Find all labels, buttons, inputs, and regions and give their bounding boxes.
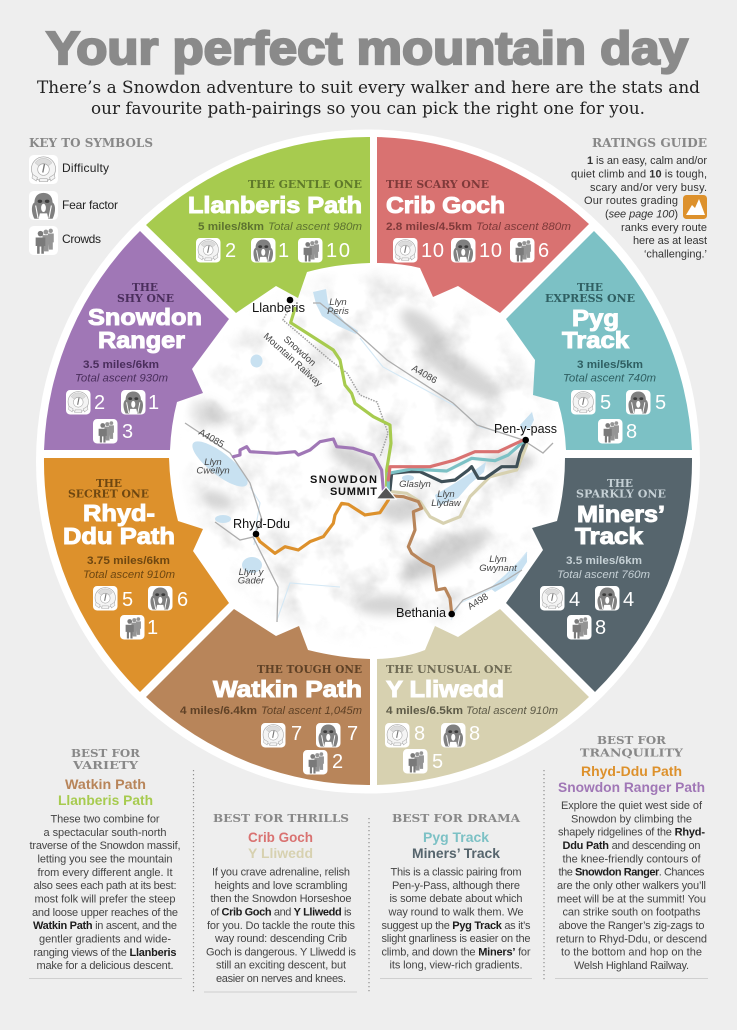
wedge <box>146 137 370 313</box>
rating: difficulty 4 <box>540 586 580 611</box>
strapline: SPARKLY ONE <box>576 488 666 500</box>
lake and road labels: Llydaw <box>431 498 462 509</box>
ratings text: ‘challenging.’ <box>644 248 707 260</box>
icon: grading mountain <box>683 195 707 219</box>
column: best for drama <box>382 812 531 972</box>
rating: fear 6: 6 <box>177 589 188 611</box>
body text: the Snowdon Ranger. Chances <box>558 867 705 879</box>
rating: difficulty 7 <box>261 723 302 748</box>
strapline <box>68 477 149 500</box>
place names: Llanberis <box>252 301 305 315</box>
stats: 5 miles/8km <box>198 221 264 233</box>
wedge <box>377 609 589 785</box>
rating: fear 10 <box>451 238 502 262</box>
panel: Pyg Track <box>506 231 692 450</box>
stats: Total ascent 880m <box>476 221 571 233</box>
route names: Pyg Track <box>423 829 489 845</box>
route: Rhyd-Ddu <box>256 500 388 553</box>
route name <box>63 500 175 549</box>
lake and road labels: Llyn <box>437 489 455 500</box>
stats <box>563 359 656 384</box>
white circle backing <box>36 130 700 794</box>
rating: fear 8: 8 <box>469 723 480 745</box>
route name: Ranger <box>98 327 185 353</box>
route: Miners' Track <box>390 442 525 490</box>
route names: Snowdon Ranger Path <box>558 779 705 795</box>
place names <box>233 301 557 620</box>
body text <box>382 867 531 972</box>
strapline: THE <box>96 477 122 490</box>
key: difficulty: Difficulty <box>62 161 109 175</box>
key heading: KEY TO SYMBOLS <box>29 136 153 150</box>
stats: 4 miles/6.4km <box>180 705 257 717</box>
ratings text: ranks every route <box>621 222 707 234</box>
stats: Total ascent 1,045m <box>261 705 362 717</box>
body text: to the bottom and hop on the <box>561 947 702 959</box>
rating: crowds 5: 5 <box>432 751 443 773</box>
intro text <box>37 78 700 118</box>
lake and road labels: A4085 <box>196 427 226 450</box>
map: Snowdon massif <box>184 274 554 624</box>
body text: shapely ridgelines of the Rhyd- <box>558 827 705 839</box>
body text <box>30 814 180 972</box>
body text: the knee-friendly contours of <box>562 853 701 865</box>
rating: fear 5: 5 <box>655 392 666 414</box>
panel: Snowdon Ranger <box>44 231 229 450</box>
rating: difficulty 10: 10 <box>421 240 444 262</box>
rating: difficulty 4: 4 <box>569 589 580 611</box>
strapline: THE TOUGH ONE <box>257 663 362 676</box>
ratings guide <box>571 136 707 260</box>
stats: 2.8 miles/4.5km <box>386 221 472 233</box>
route names <box>412 829 500 861</box>
body text: traverse of the Snowdon massif, <box>30 840 180 852</box>
rating: crowds 1: 1 <box>147 617 158 639</box>
body text: and loose upper reaches of the <box>32 907 178 919</box>
route name: Llanberis Path <box>188 192 362 218</box>
stats <box>386 221 571 233</box>
panel: Rhyd-Ddu Path <box>44 458 229 692</box>
rating: crowds 1 <box>120 615 158 640</box>
rating: fear 1: 1 <box>278 240 289 262</box>
route: Snowdon Ranger <box>233 439 383 490</box>
rivers <box>250 338 527 620</box>
railway <box>283 307 388 457</box>
route names: Rhyd-Ddu Path <box>581 763 682 779</box>
stats: Total ascent 980m <box>268 221 362 233</box>
rating: fear 7 <box>316 723 358 748</box>
stats: Total ascent 760m <box>557 569 650 581</box>
panel: Watkin Path <box>146 609 370 785</box>
place names: Pen-y-pass <box>494 422 557 436</box>
title: Your perfect mountain day <box>46 22 688 74</box>
stats <box>198 221 362 233</box>
rating: crowds 10: 10 <box>326 240 350 262</box>
route: Y Lliwedd <box>392 445 527 523</box>
key: crowds: Crowds <box>62 232 101 246</box>
intro text: our favourite path-pairings so you can pick the right one for you. <box>91 99 645 118</box>
rating: difficulty 5: 5 <box>122 589 133 611</box>
panel: Miners' Track <box>506 458 692 692</box>
place names: SNOWDON <box>310 474 377 486</box>
route name: Snowdon <box>88 304 202 330</box>
column heading <box>580 734 683 760</box>
rating: fear 8 <box>441 723 480 748</box>
column: best for variety <box>30 747 180 972</box>
stats: Total ascent 910m <box>83 569 175 581</box>
rating: crowds 8 <box>567 615 606 640</box>
lake and road labels: A498 <box>466 591 490 613</box>
body text: suggest up the Pyg Track as it’s <box>382 920 531 932</box>
strapline <box>576 477 666 500</box>
strapline: THE UNUSUAL ONE <box>386 663 512 676</box>
stats <box>75 359 168 384</box>
place names: Rhyd-Ddu <box>233 517 290 531</box>
lake and road labels: Llyn y <box>239 567 265 578</box>
stats <box>386 705 558 717</box>
body text: most folk will prefer the steep <box>34 894 176 906</box>
body text: Pen-y-Pass, although there <box>392 880 520 892</box>
lake and road labels: Llyn <box>489 554 507 565</box>
wedge <box>506 231 692 450</box>
lake and road labels: Peris <box>327 306 349 317</box>
rating: crowds 8: 8 <box>626 421 637 443</box>
body text: Ddu Path and descending on <box>562 840 700 852</box>
rating: fear 4 <box>595 586 634 611</box>
lake and road labels: A4086 <box>410 363 439 386</box>
body text: climb, and down the Miners’ for <box>382 946 531 958</box>
route name: Y Lliwedd <box>386 676 504 702</box>
rating: crowds 2: 2 <box>332 751 343 773</box>
route: Llanberis <box>291 308 391 490</box>
strapline: THE <box>607 477 633 490</box>
body text: This is a classic pairing from <box>390 867 522 879</box>
lake and road labels: Snowdon <box>281 334 318 369</box>
lake and road labels: Mountain Railway <box>261 331 324 390</box>
route: Crib Goch <box>388 440 523 480</box>
lake and road labels <box>196 297 517 613</box>
rating: crowds 10 <box>298 238 350 262</box>
place names: SUMMIT <box>330 486 377 498</box>
column heading: TRANQUILITY <box>580 746 683 760</box>
ratings text: quiet climb and 10 is tough, <box>571 168 707 180</box>
body text: also sees each path at its best: <box>34 880 176 892</box>
route name: Rhyd- <box>83 500 155 526</box>
ratings text: here as at least <box>633 235 707 247</box>
route names <box>58 776 153 808</box>
lake and road labels: Cwellyn <box>196 466 230 476</box>
ratings heading: RATINGS GUIDE <box>592 136 707 150</box>
summit triangle <box>376 487 396 499</box>
lake and road labels: Glaslyn <box>399 479 431 490</box>
route name: Crib Goch <box>386 192 505 218</box>
route name: Miners’ <box>577 501 665 527</box>
strapline: THE SCARY ONE <box>386 178 489 191</box>
column: best for tranquility <box>556 734 707 972</box>
route names <box>558 763 705 795</box>
route name <box>575 501 665 549</box>
place names: Bethania <box>396 606 446 620</box>
panel: Y Lliwedd <box>377 609 589 785</box>
body text: ranging views of the Llanberis <box>34 947 176 959</box>
rating: crowds 3 <box>93 419 133 444</box>
rating: crowds 6: 6 <box>538 240 549 262</box>
rating: fear 1 <box>251 238 289 262</box>
body text: Welsh Highland Railway. <box>574 960 689 972</box>
body text: make for a delicious descent. <box>36 960 174 972</box>
strapline: SECRET ONE <box>68 488 149 500</box>
rating: crowds 8: 8 <box>595 617 606 639</box>
rating: crowds 5 <box>403 749 443 774</box>
rating: crowds 6 <box>510 238 549 262</box>
rating: difficulty 2 <box>196 238 236 262</box>
wedge <box>506 458 692 692</box>
route names: Crib Goch <box>248 829 313 845</box>
rating: difficulty 10 <box>393 238 444 262</box>
body text: then the Snowdon Horseshoe <box>210 893 352 905</box>
body text: can strike south on footpaths <box>562 907 701 919</box>
body text: above the Ranger’s zig-zags to <box>558 920 704 932</box>
ratings text: 1 is an easy, calm and/or <box>587 155 707 167</box>
intro text: There’s a Snowdon adventure to suit every walker and here are the stats and <box>37 78 700 97</box>
rating: fear 7: 7 <box>347 723 358 745</box>
column heading: BEST FOR <box>597 734 667 747</box>
body text: Explore the quiet west side of <box>561 800 703 812</box>
body text: is some debate about which <box>390 893 522 905</box>
ratings text: (see page 100) <box>605 208 678 220</box>
column heading: BEST FOR <box>71 747 141 760</box>
body text: its long, view-rich gradients. <box>390 960 522 972</box>
body text: gentler gradients and wide- <box>39 934 171 946</box>
stats: 3 miles/5km <box>577 359 643 371</box>
route: Pyg Track <box>388 442 523 490</box>
body text: Watkin Path in ascent, and the <box>33 920 177 932</box>
terrain shading <box>188 274 546 624</box>
route names: Llanberis Path <box>58 792 153 808</box>
stats <box>180 705 362 717</box>
route name: Track <box>575 523 643 549</box>
column: best for thrills <box>206 812 356 985</box>
lakes <box>186 289 534 592</box>
rating: crowds 3: 3 <box>122 421 133 443</box>
column heading: BEST FOR DRAMA <box>392 812 521 825</box>
body text: from every different angle. It <box>38 867 172 879</box>
key: fear factor: Fear factor <box>62 198 118 212</box>
rating: difficulty 2: 2 <box>94 392 105 414</box>
stats: 3.5 miles/6km <box>83 359 159 371</box>
rating: fear 1 <box>121 390 159 414</box>
strapline: SHY ONE <box>117 292 174 305</box>
rating: crowds 2 <box>303 750 343 774</box>
stats <box>83 555 175 581</box>
rating: difficulty 2 <box>66 390 105 414</box>
route name: Ddu Path <box>63 523 175 549</box>
route names: Miners’ Track <box>412 845 500 861</box>
stats: 4 miles/6.5km <box>386 705 463 717</box>
ratings text: Our routes grading <box>584 195 678 207</box>
rating: difficulty 8 <box>385 723 425 748</box>
route names: Y Lliwedd <box>248 845 313 861</box>
column heading: BEST FOR THRILLS <box>213 812 349 825</box>
body text: still an exciting descent, but <box>216 960 346 972</box>
lake and road labels: Llyn <box>204 457 222 468</box>
rating: crowds 8 <box>598 419 637 444</box>
strapline: THE <box>132 281 158 294</box>
body text: If you crave adrenaline, relish <box>212 867 350 879</box>
strapline: EXPRESS ONE <box>545 292 635 305</box>
body text: letting you see the mountain <box>38 854 172 866</box>
strapline: THE GENTLE ONE <box>248 178 362 191</box>
route name: Track <box>562 327 629 353</box>
body text: are the only other walkers you’ll <box>557 880 706 892</box>
lake and road labels: Gader <box>238 576 265 586</box>
key to symbols <box>29 136 153 255</box>
wedge <box>146 609 370 785</box>
marker dots <box>253 297 529 617</box>
map markers and labels <box>196 297 557 620</box>
strapline <box>545 281 635 305</box>
route: Watkin <box>393 496 452 613</box>
rating: fear 6 <box>148 586 188 611</box>
rating: difficulty 7: 7 <box>291 723 302 745</box>
body text: These two combine for <box>50 814 160 826</box>
ratings text <box>571 155 707 260</box>
body text: Snowdon by climbing the <box>571 813 692 825</box>
wedge <box>44 231 229 450</box>
strapline: THE <box>577 281 603 294</box>
stats: Total ascent 740m <box>563 372 656 384</box>
rating: difficulty 5: 5 <box>600 392 611 414</box>
rating: fear 4: 4 <box>623 589 634 611</box>
ratings text: scary and/or very busy. <box>590 182 707 194</box>
body text: of Crib Goch and Y Lliwedd is <box>210 906 352 918</box>
walking routes <box>233 308 527 613</box>
body text: Goch is dangerous. Y Lliwedd is <box>206 946 356 958</box>
body text: for you. Do tackle the route this <box>207 920 356 932</box>
route names <box>248 829 313 861</box>
rating: difficulty 5 <box>93 586 133 611</box>
stats: Total ascent 930m <box>75 372 168 384</box>
stats: 3.75 miles/6km <box>87 555 170 567</box>
panel: Crib Goch <box>377 137 589 313</box>
column heading <box>71 747 141 772</box>
rating: fear 1: 1 <box>148 392 159 414</box>
route name: Pyg <box>572 305 619 331</box>
lake and road labels: Gwynant <box>479 563 517 574</box>
body text: slight gnarliness is easier on the <box>382 933 530 945</box>
rating: difficulty 2: 2 <box>225 240 236 262</box>
body text: heights and love scrambling <box>214 880 348 892</box>
body text <box>556 800 707 972</box>
lake and road labels: Llyn <box>329 297 347 308</box>
route name <box>562 305 629 353</box>
wedge <box>377 137 589 313</box>
panel: Llanberis Path <box>146 137 370 313</box>
body text: way round to walk them. We <box>388 906 524 918</box>
route name <box>88 304 202 353</box>
body text <box>206 867 356 985</box>
route name: Watkin Path <box>213 676 362 702</box>
column heading: VARIETY <box>72 759 138 772</box>
route names: Watkin Path <box>65 776 146 792</box>
roads <box>185 303 553 622</box>
stats: 3.5 miles/6km <box>566 555 642 567</box>
rating: difficulty 8: 8 <box>414 723 425 745</box>
rating: fear 5 <box>626 390 666 414</box>
body text: return to Rhyd-Ddu, or descend <box>556 933 707 945</box>
body text: a spectacular south-north <box>44 827 166 839</box>
stats: Total ascent 910m <box>466 705 558 717</box>
stats <box>557 555 650 581</box>
wedge <box>44 458 229 692</box>
rating: difficulty 5 <box>571 390 611 414</box>
body text: meet will be at the summit! You <box>557 893 706 905</box>
body text: easier on nerves and knees. <box>216 973 346 985</box>
body text: way round: descending Crib <box>214 933 347 945</box>
rating: fear 10: 10 <box>479 240 502 262</box>
strapline <box>117 281 174 305</box>
